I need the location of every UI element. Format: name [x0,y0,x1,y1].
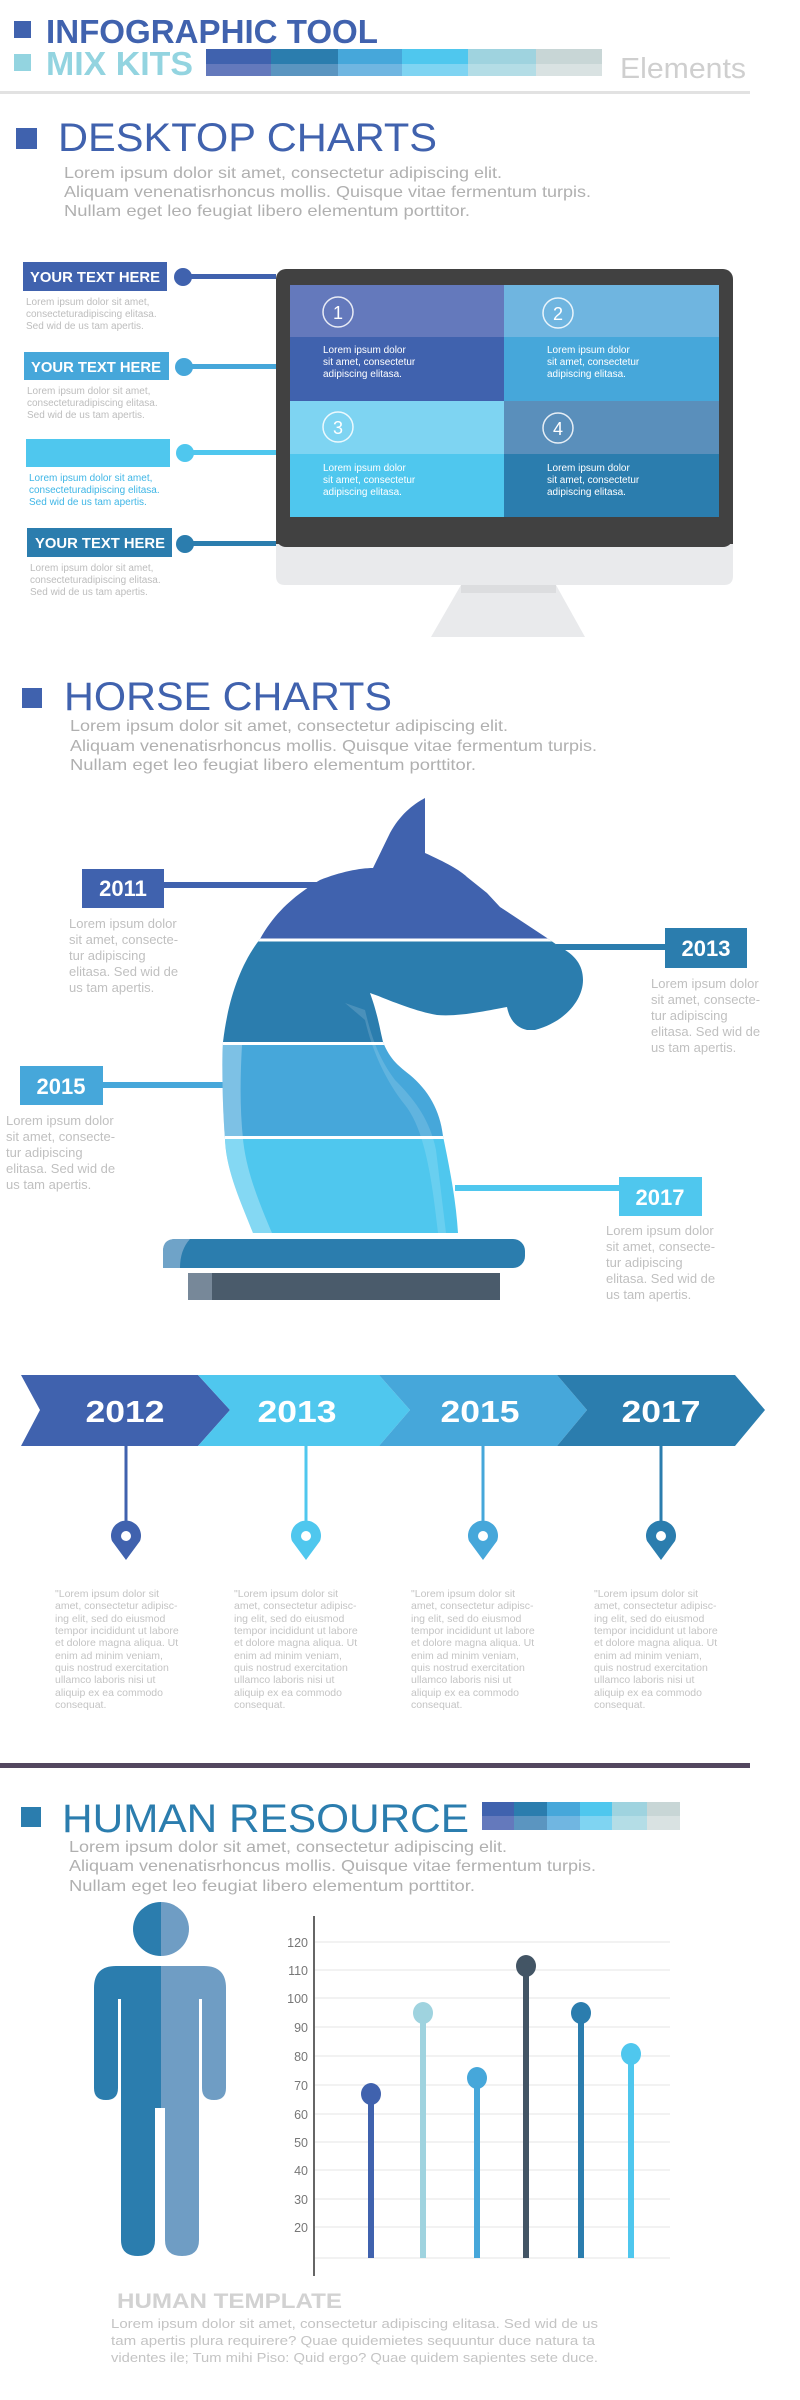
intro text: Nullam eget leo feugiat libero elementum porttitor. [64,203,470,220]
timeline item 2012 [55,1446,179,1711]
lollipops [361,1955,641,2258]
y-axis labels: 40 [294,2164,308,2178]
label 2015: Lorem ipsum dolor [6,1113,114,1128]
label 3: Lorem ipsum dolor sit amet, [29,473,152,484]
timeline item 2013: "Lorem ipsum dolor sit [234,1588,338,1600]
human figure icon [94,1902,226,2256]
label 4: Lorem ipsum dolor sit amet, [30,563,153,574]
label 4: Sed wid de us tam apertis. [30,587,148,598]
label 1: Sed wid de us tam apertis. [26,321,144,332]
timeline item 2015 [411,1446,535,1711]
timeline item 2017: ing elit, sed do eiusmod [594,1613,704,1625]
cell 3: Lorem ipsum dolor [323,463,406,474]
label 2017: 2017 [636,1185,684,1210]
cell 2: sit amet, consectetur [547,357,640,368]
timeline item 2013: amet, consectetur adipisc- [234,1600,357,1612]
timeline item 2013: tempor incididunt ut labore [234,1625,358,1637]
timeline item 2015: et dolore magna aliqua. Ut [411,1637,534,1649]
label 1: consecteturadipiscing elitasa. [26,309,157,320]
timeline item 2012: "Lorem ipsum dolor sit [55,1588,159,1600]
cell 3: 3 [333,418,343,438]
label 1 [23,262,276,332]
cell 2: Lorem ipsum dolor [547,345,630,356]
timeline item 2015: tempor incididunt ut labore [411,1625,535,1637]
y-axis labels: 30 [294,2193,308,2207]
subtitle: mix kits: MIX KITS [46,45,193,82]
timeline item 2017: quis nostrud exercitation [594,1662,708,1674]
timeline item 2012: quis nostrud exercitation [55,1662,169,1674]
cell 2 [504,285,719,401]
timeline item 2015: aliquip ex ea commodo [411,1687,519,1699]
intro text [70,718,597,774]
horse knight chart [163,798,583,1300]
label 2017: elitasa. Sed wid de [606,1271,715,1286]
cell 2: adipiscing elitasa. [547,369,626,380]
y-axis labels [287,1936,308,2235]
human template heading: HUMAN TEMPLATE [117,2290,342,2313]
timeline item 2017: enim ad minim veniam, [594,1650,702,1662]
label 2017: tur adipiscing [606,1255,683,1270]
intro text: Lorem ipsum dolor sit amet, consectetur adipiscing elit. [70,718,508,735]
label 2015: sit amet, consecte- [6,1129,115,1144]
cell 4: Lorem ipsum dolor [547,463,630,474]
timeline item 2015: "Lorem ipsum dolor sit [411,1588,515,1600]
cell 1: Lorem ipsum dolor [323,345,406,356]
timeline item 2012: amet, consectetur adipisc- [55,1600,178,1612]
y-axis labels: 80 [294,2050,308,2064]
timeline item 2013: enim ad minim veniam, [234,1650,342,1662]
cell 1: sit amet, consectetur [323,357,416,368]
chevron arrows [21,1375,765,1446]
timeline item 2012: et dolore magna aliqua. Ut [55,1637,178,1649]
y-axis labels: 110 [288,1964,308,1978]
label 2013: tur adipiscing [651,1008,728,1023]
y-axis labels: 100 [287,1992,308,2006]
cell 1 [290,285,504,401]
label 3 [26,439,276,508]
intro text: Lorem ipsum dolor sit amet, consectetur adipiscing elit. [69,1839,507,1856]
lollipop chart [287,1916,670,2276]
timeline item 2012: ing elit, sed do eiusmod [55,1613,165,1625]
timeline item 2017: et dolore magna aliqua. Ut [594,1637,717,1649]
label 2015: 2015 [37,1074,85,1099]
timeline item 2017: "Lorem ipsum dolor sit [594,1588,698,1600]
intro text: Lorem ipsum dolor sit amet, consectetur adipiscing elit. [64,165,502,182]
cell 3: sit amet, consectetur [323,475,416,486]
timeline item 2017: ullamco laboris nisi ut [594,1674,694,1686]
cell 3 [290,401,504,517]
connector lines [103,882,666,1191]
label 2013 [651,928,760,1055]
chevron arrows: 2013 [258,1394,336,1429]
timeline item 2013: ullamco laboris nisi ut [234,1674,334,1686]
chevron arrows: 2012 [86,1394,164,1429]
timeline item 2012: aliquip ex ea commodo [55,1687,163,1699]
timeline item 2013 [234,1446,358,1711]
timeline item 2015: ing elit, sed do eiusmod [411,1613,521,1625]
timeline item 2015: consequat. [411,1699,462,1711]
heading: horse charts: HORSE CHARTS [64,675,392,719]
timeline item 2013: ing elit, sed do eiusmod [234,1613,344,1625]
monitor [276,269,733,637]
label 2015: tur adipiscing [6,1145,83,1160]
label 2: Sed wid de us tam apertis. [27,410,145,421]
intro text: Aliquam venenatisrhoncus mollis. Quisque vitae fermentum turpis. [64,184,591,201]
label 2015: elitasa. Sed wid de [6,1161,115,1176]
human template text: videntes ile; Tum mihi Piso: Quid ergo? Quae quidem sapientes sete duce. [111,2350,598,2365]
y-axis labels: 50 [294,2136,308,2150]
intro text [64,165,591,220]
chevron arrows: 2017 [622,1394,700,1429]
cell 1: adipiscing elitasa. [323,369,402,380]
timeline item 2015: quis nostrud exercitation [411,1662,525,1674]
label 2015 [6,1066,115,1192]
timeline item 2015: enim ad minim veniam, [411,1650,519,1662]
label 2015: us tam apertis. [6,1177,91,1192]
label 2013: sit amet, consecte- [651,992,760,1007]
label 2013: Lorem ipsum dolor [651,976,759,991]
cell 3: adipiscing elitasa. [323,487,402,498]
y-axis labels: 120 [287,1936,308,1950]
human template text [111,2316,599,2365]
label 3: consecteturadipiscing elitasa. [29,485,160,496]
cell 4 [504,401,719,517]
section: horse charts [6,675,760,1302]
timeline item 2012: consequat. [55,1699,106,1711]
label 2017 [606,1177,715,1302]
timeline item 2012: ullamco laboris nisi ut [55,1674,155,1686]
timeline item 2017 [594,1446,718,1711]
cell 2: 2 [553,304,563,324]
label 3: Sed wid de us tam apertis. [29,497,147,508]
label 2011: elitasa. Sed wid de [69,964,178,979]
section: timeline [21,1375,765,1711]
timeline item 2015: ullamco laboris nisi ut [411,1674,511,1686]
horse base [163,1239,525,1300]
label 4 [27,528,276,598]
label 2: Lorem ipsum dolor sit amet, [27,386,150,397]
human template text: tam apertis plura requirere? Quae quidemietes sequuntur duce natura ta [111,2333,596,2348]
label 2017: sit amet, consecte- [606,1239,715,1254]
chevron arrows: 2015 [440,1394,520,1429]
timeline item 2013: aliquip ex ea commodo [234,1687,342,1699]
human template text: Lorem ipsum dolor sit amet, consectetur adipiscing elitasa. Sed wid de us [111,2316,599,2331]
heading: desktop charts: DESKTOP CHARTS [58,116,437,160]
colour palette bar [482,1802,680,1830]
cell 1: 1 [333,303,343,323]
timeline item 2012: enim ad minim veniam, [55,1650,163,1662]
timeline item 2013: consequat. [234,1699,285,1711]
label 4: consecteturadipiscing elitasa. [30,575,161,586]
cell 4: adipiscing elitasa. [547,487,626,498]
label 2 [24,352,276,421]
timeline item 2017: amet, consectetur adipisc- [594,1600,717,1612]
label 1: YOUR TEXT HERE [30,269,160,286]
timeline item 2017: aliquip ex ea commodo [594,1687,702,1699]
y-axis labels: 20 [294,2221,308,2235]
label 2011: tur adipiscing [69,948,146,963]
label 2017: us tam apertis. [606,1287,691,1302]
intro text: Nullam eget leo feugiat libero elementum porttitor. [70,757,476,774]
timeline item 2012: tempor incididunt ut labore [55,1625,179,1637]
label 2011: Lorem ipsum dolor [69,916,177,931]
label 2017: Lorem ipsum dolor [606,1223,714,1238]
label 2013: us tam apertis. [651,1040,736,1055]
header [14,13,746,85]
intro text: Nullam eget leo feugiat libero elementum porttitor. [69,1878,475,1895]
timeline item 2015: amet, consectetur adipisc- [411,1600,534,1612]
colour palette bar [206,49,602,76]
timeline item 2017: tempor incididunt ut labore [594,1625,718,1637]
heading: human resource: HUMAN RESOURCE [62,1797,469,1841]
timeline item 2013: et dolore magna aliqua. Ut [234,1637,357,1649]
label 2013: 2013 [682,936,730,961]
label 2013: elitasa. Sed wid de [651,1024,760,1039]
label 2011 [69,869,178,995]
timeline item 2017: consequat. [594,1699,645,1711]
label 4: YOUR TEXT HERE [35,535,165,552]
label 2: consecteturadipiscing elitasa. [27,398,158,409]
intro text [69,1839,596,1895]
section: human resource [21,1797,680,2365]
y-axis labels: 90 [294,2021,308,2035]
elements label: Elements [620,53,746,85]
intro text: Aliquam venenatisrhoncus mollis. Quisque vitae fermentum turpis. [70,738,597,755]
label 2011: 2011 [99,876,147,901]
label 2: YOUR TEXT HERE [31,359,161,376]
label 1: Lorem ipsum dolor sit amet, [26,297,149,308]
header squares [14,21,31,71]
cell 4: 4 [553,419,563,439]
section: desktop charts [16,116,733,637]
y-axis labels: 60 [294,2108,308,2122]
label 2011: sit amet, consecte- [69,932,178,947]
y-axis labels: 70 [294,2079,308,2093]
title: infographic tool: INFOGRAPHIC TOOL [46,13,378,50]
label 2011: us tam apertis. [69,980,154,995]
timeline item 2013: quis nostrud exercitation [234,1662,348,1674]
cell 4: sit amet, consectetur [547,475,640,486]
intro text: Aliquam venenatisrhoncus mollis. Quisque vitae fermentum turpis. [69,1858,596,1875]
